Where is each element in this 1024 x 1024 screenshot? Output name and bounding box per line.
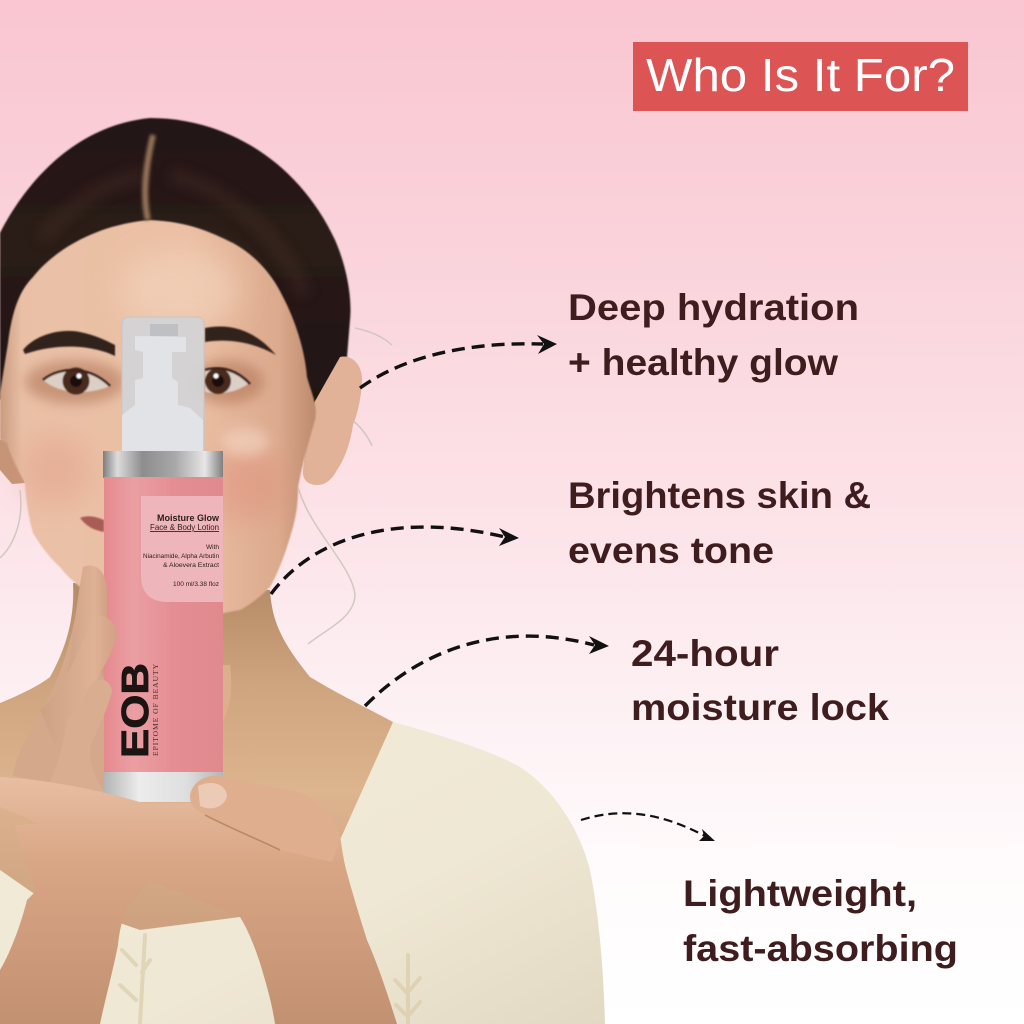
metal collar	[103, 451, 223, 478]
benefit: lightweight: Lightweight,	[683, 873, 917, 914]
woman holding product	[0, 118, 605, 1024]
dress embroidery: right	[395, 955, 420, 1024]
ear	[303, 357, 362, 485]
lower hand and left forearm	[0, 820, 160, 1024]
neck and chest	[0, 583, 393, 930]
label text: & Aloevera Extract	[163, 562, 219, 569]
right eyebrow	[205, 326, 276, 355]
cheek highlight right	[221, 428, 269, 456]
ring finger	[50, 680, 112, 792]
label text: 100 ml/3.38 floz	[173, 581, 219, 588]
label text: Face & Body Lotion	[150, 522, 219, 532]
arrow: hydration	[360, 335, 557, 388]
title badge: Who Is It For?	[646, 49, 955, 101]
hair sheen	[40, 175, 305, 295]
face	[0, 220, 316, 625]
cheek blush right	[205, 449, 285, 521]
forehead highlight	[120, 250, 240, 330]
EOB logo: EOB	[115, 663, 157, 758]
hands holding bottle	[0, 566, 397, 1024]
benefit: brightening: evens tone	[568, 530, 774, 571]
benefit: hydration: + healthy glow	[568, 342, 838, 383]
pink body	[104, 477, 223, 773]
label panel	[141, 496, 223, 602]
thumbnail	[198, 783, 227, 808]
cheek blush left	[19, 434, 91, 506]
hair	[0, 118, 350, 425]
skin behind bottle right	[218, 665, 231, 722]
benefit: brightening: Brightens skin &	[568, 475, 871, 516]
pump	[122, 336, 203, 452]
left ear edge	[0, 440, 25, 484]
benefit: moisture lock	[631, 633, 889, 728]
thumb crease	[205, 815, 280, 850]
left eye socket shadow	[25, 360, 125, 404]
benefit: hydration: Deep hydration	[568, 287, 859, 328]
arrow: brightening	[271, 527, 519, 594]
thumb	[190, 776, 340, 862]
arrow: moisture lock	[365, 636, 609, 706]
metal base	[103, 772, 223, 802]
back of raised hand	[13, 607, 104, 792]
middle finger	[40, 615, 117, 745]
arrow: lightweight	[581, 813, 715, 841]
label text: Moisture Glow	[157, 513, 220, 524]
left eyebrow	[23, 331, 115, 356]
lips	[80, 516, 104, 532]
benefit: brightening	[568, 475, 871, 571]
benefit: hydration	[568, 287, 859, 383]
benefit: moisture lock: moisture lock	[631, 687, 889, 728]
hair parting	[145, 135, 153, 220]
cap top shade	[150, 324, 178, 336]
right eye	[205, 368, 250, 394]
product bottle	[103, 317, 223, 802]
benefit: lightweight	[683, 873, 958, 969]
label text: With	[206, 544, 219, 551]
benefit: moisture lock: 24-hour	[631, 633, 779, 674]
benefit: lightweight: fast-absorbing	[683, 928, 958, 969]
dress	[0, 722, 605, 1024]
stray hair strands	[0, 328, 392, 644]
left eye	[43, 368, 110, 394]
index finger	[65, 566, 107, 690]
dress embroidery: left	[120, 935, 150, 1024]
label text: Niacinamide, Alpha Arbutin	[143, 553, 219, 560]
right eye socket shadow	[192, 360, 264, 404]
clear cap	[122, 317, 204, 452]
label text	[143, 513, 220, 588]
title badge	[633, 42, 968, 111]
EPITOME OF BEAUTY tagline: EPITOME OF BEAUTY	[151, 663, 160, 756]
palm and right forearm	[0, 777, 397, 1024]
